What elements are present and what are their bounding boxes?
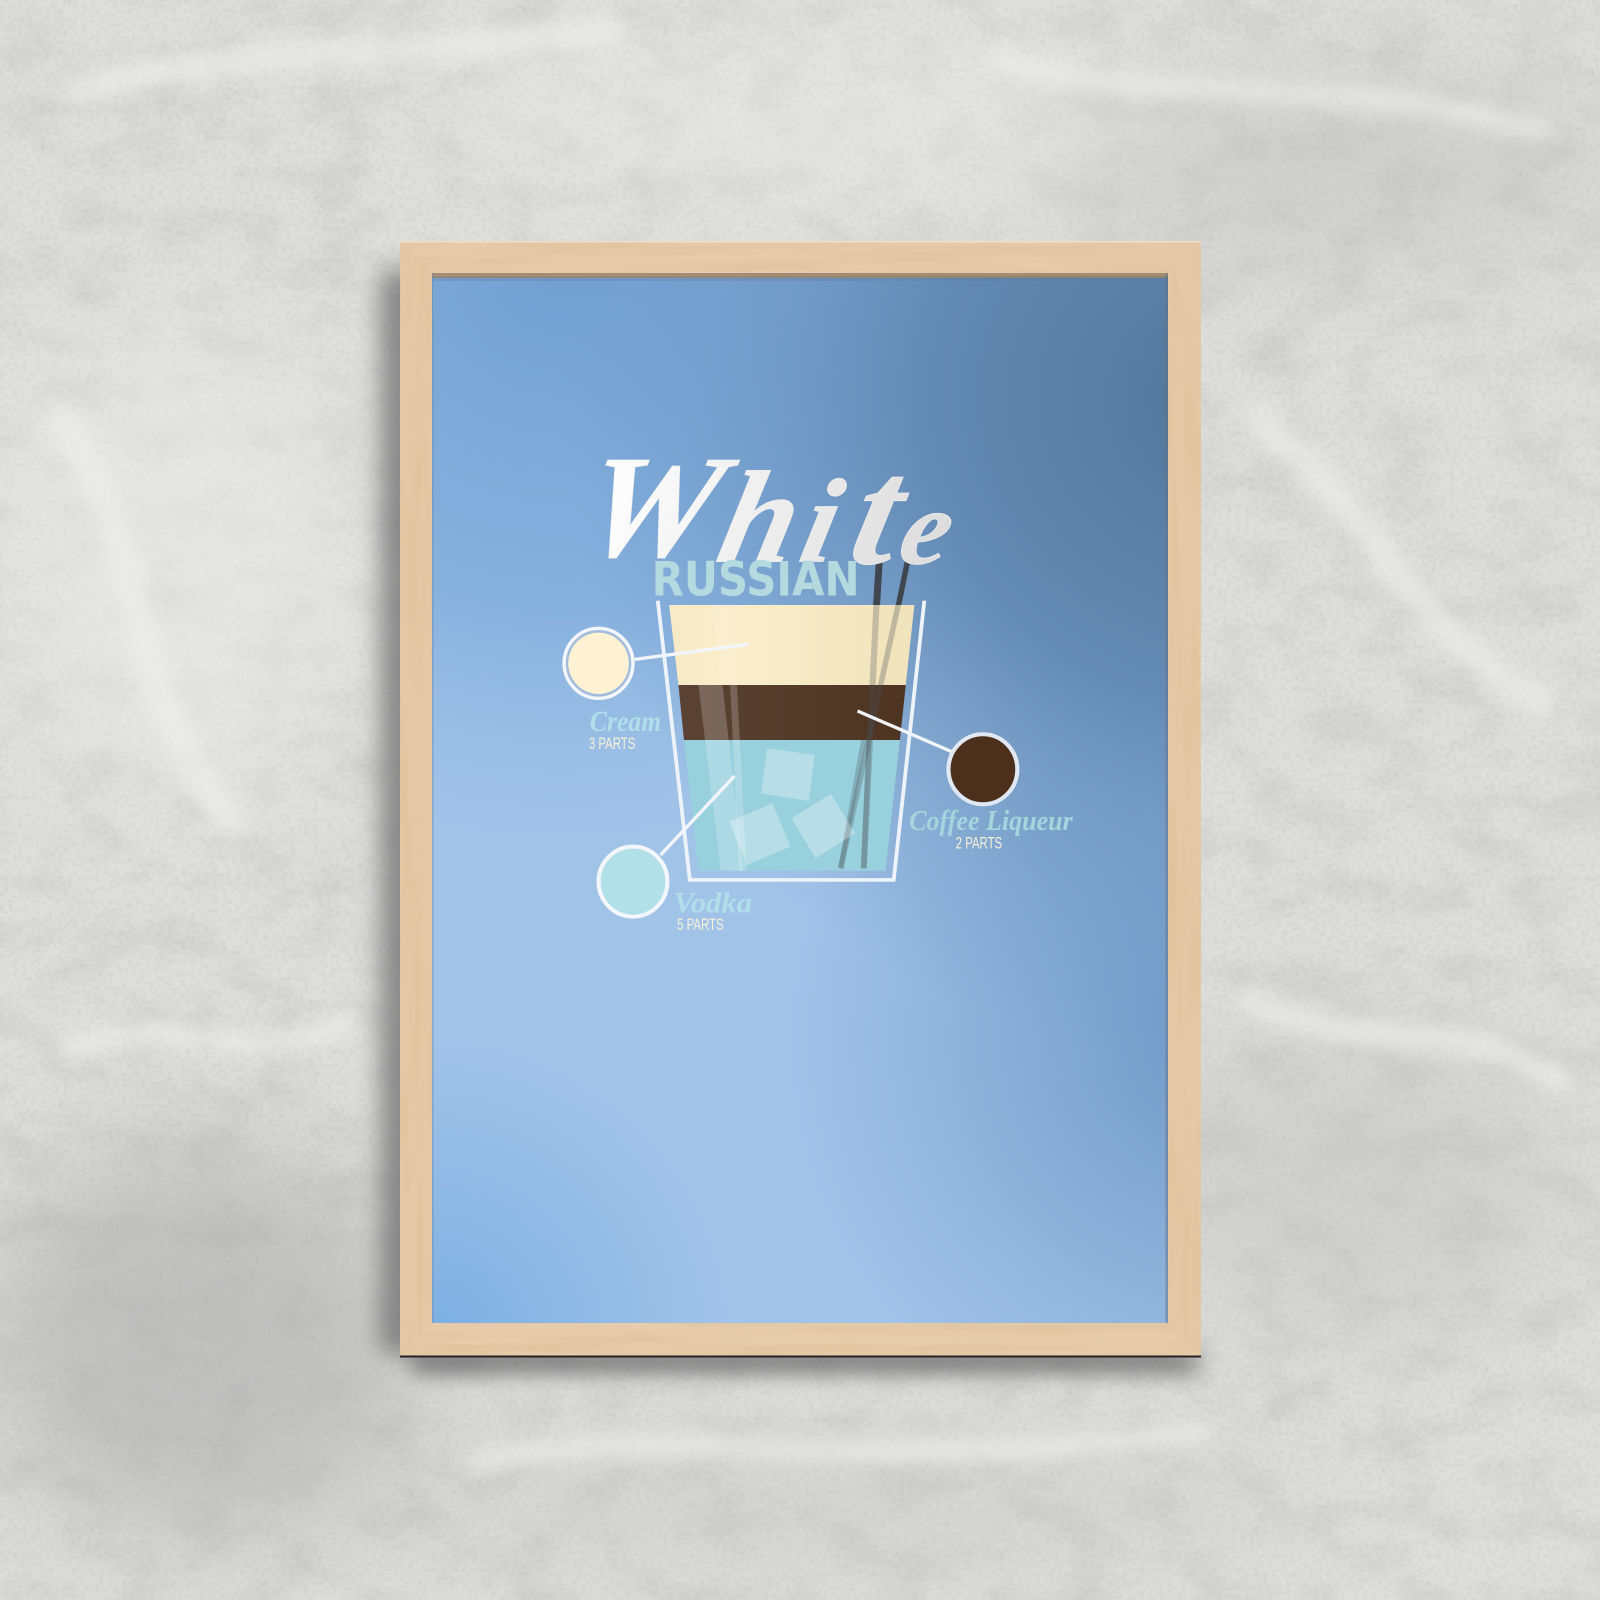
straws above the liquid: [876, 553, 909, 607]
callout: vodka: Vodka: [674, 886, 752, 920]
vodka layer: [684, 740, 900, 871]
callout: coffee liqueur: 2 PARTS: [956, 834, 1002, 852]
wooden frame: [400, 241, 1201, 1358]
callout: coffee liqueur: Coffee Liqueur: [909, 805, 1073, 837]
callout: cream: [564, 628, 748, 753]
coffee liqueur layer: [678, 685, 906, 740]
glass outline: [658, 601, 924, 880]
cream layer: [669, 605, 914, 685]
title: White: h: [707, 445, 815, 591]
title: White: i: [790, 455, 854, 588]
title: White: W: [568, 426, 748, 588]
frame drop shadow: [380, 270, 1198, 1374]
callout: cream: Cream: [590, 704, 661, 738]
title: White: t: [838, 427, 924, 597]
title: White: e: [891, 468, 966, 587]
subtitle: Russian: RUSSIAN: [652, 553, 860, 607]
straws and reflections inside the liquid: [698, 605, 898, 871]
callout: cream: 3 PARTS: [589, 734, 635, 753]
callout: vodka: [599, 776, 752, 934]
poster artwork background: [432, 273, 1168, 1323]
callout: vodka: 5 PARTS: [677, 915, 724, 934]
cocktail infographic: [564, 426, 1073, 934]
callout: coffee liqueur: [858, 711, 1073, 852]
ice cubes: [729, 748, 855, 865]
